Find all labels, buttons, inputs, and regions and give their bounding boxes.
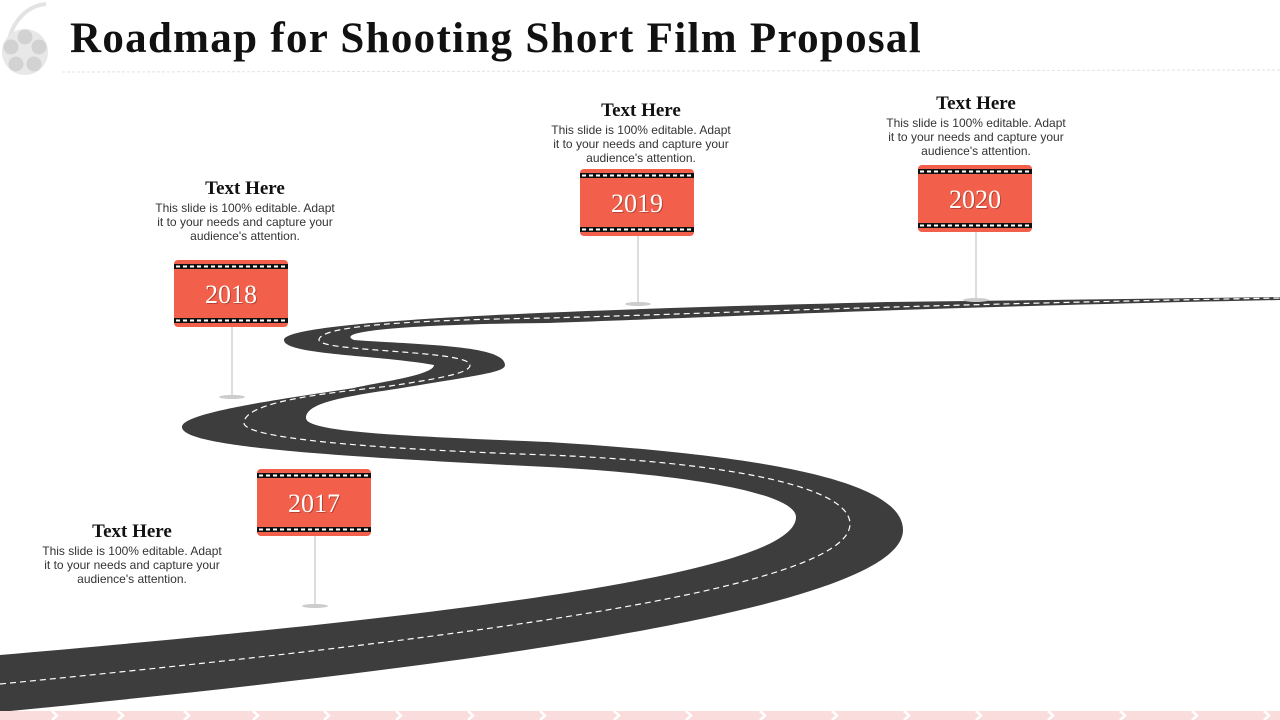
sign: 2020 — [918, 165, 1032, 302]
text block: 2020: Text Here — [936, 93, 1016, 114]
text block: 2020: This slide is 100% editable. Adapt it to your needs and capture your audience's attention. — [886, 116, 1066, 158]
sign: 2020: 2020 — [950, 186, 1002, 215]
text block: 2018: This slide is 100% editable. Adapt it to your needs and capture your audience's attention. — [155, 201, 335, 243]
sign: 2018: 2018 — [205, 280, 257, 309]
sign: 2019: 2019 — [612, 190, 664, 219]
text block: 2019: This slide is 100% editable. Adapt it to your needs and capture your audience's attention. — [551, 123, 731, 165]
text block: 2018: Text Here — [205, 178, 285, 199]
sign: 2017: 2017 — [288, 489, 340, 518]
text block: 2017: Text Here — [92, 521, 172, 542]
text block: 2018 — [155, 178, 335, 243]
sign: 2019 — [580, 169, 694, 306]
road — [0, 297, 1280, 712]
sign: 2018: 2018 — [206, 281, 258, 310]
text block: 2019 — [551, 100, 731, 165]
sign: 2020: 2020 — [949, 185, 1001, 214]
text block: 2017: This slide is 100% editable. Adapt it to your needs and capture your audience's attention. — [42, 544, 222, 586]
footer chevrons — [0, 711, 1280, 720]
text block: 2019: Text Here — [601, 100, 681, 121]
text block: 2020 — [886, 93, 1066, 158]
sign: 2017: 2017 — [289, 490, 341, 519]
sign: 2017 — [257, 469, 371, 608]
sign: 2018 — [174, 260, 288, 399]
sign: 2019: 2019 — [611, 189, 663, 218]
text block: 2017 — [42, 521, 222, 586]
icon: film reel — [2, 2, 48, 75]
title: Roadmap for Shooting Short Film Proposal — [70, 15, 922, 62]
